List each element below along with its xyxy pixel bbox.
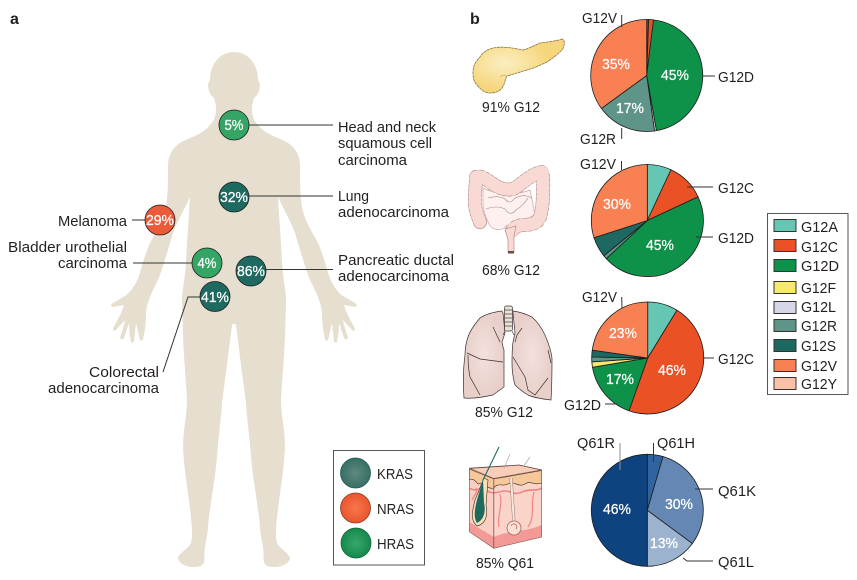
legend: G12 and mutation colours: G12F [801,280,836,297]
legend: G12 and mutation colours: G12C [801,239,838,256]
text: lung G12 share: 85% G12 [475,404,533,421]
pie chart: melanoma: 46% [603,501,631,518]
legend: G12 and mutation colours: G12A [801,219,838,236]
pie labels: melanoma: Q61K [718,483,756,500]
callout: melanoma [58,205,175,235]
pie labels: melanoma: Q61L [718,554,754,571]
pie labels: melanoma: Q61H [657,435,695,452]
pie chart: colorectal: 30% [603,196,631,213]
pie chart: colorectal: 45% [646,237,674,254]
legend: RAS isoforms: KRAS [377,466,413,483]
pie chart: pancreas: 17% [616,100,644,117]
callout: bladder [8,239,222,278]
callout: head and neck: carcinoma [338,152,408,169]
pie chart: melanoma: 13% [650,535,678,552]
callout: melanoma: Melanoma [58,213,128,230]
pie labels: pancreas: G12D [718,69,754,86]
callout: pancreatic: Pancreatic ductal [338,252,454,269]
pie chart: melanoma [591,454,703,566]
callout: lung: Lung [338,188,369,205]
callout: bladder: 4% [198,255,216,272]
pie chart: lung: 23% [609,325,637,342]
icon: lungs [463,306,552,400]
legend: G12 and mutation colours: G12V [801,358,837,375]
callout: colorectal [48,282,230,397]
pie labels: lung: G12D [564,397,601,414]
legend: G12 and mutation colours: G12L [801,299,836,316]
pie chart: colorectal [591,164,703,277]
legend: G12 and mutation colours: G12S [801,338,836,355]
callout: colorectal: 41% [201,289,229,306]
legend: RAS isoforms: NRAS [377,501,414,518]
body silhouette [111,52,357,567]
callout: colorectal: adenocarcinoma [48,380,160,397]
callout: lung [219,182,450,221]
pie chart: pancreas [591,19,703,132]
pie chart: lung [592,302,704,414]
callout: head and neck: Head and neck [338,119,436,136]
text: pancreas G12 share: 91% G12 [482,99,540,116]
legend: RAS isoforms [334,450,424,565]
pie labels: colorectal: G12V [580,156,616,173]
callout: melanoma: 29% [146,212,174,229]
callout: lung: 32% [220,189,248,206]
pie chart: pancreas: 35% [602,56,630,73]
panel label b: b [470,11,480,28]
pie labels: colorectal: G12D [718,230,754,247]
pie labels: pancreas: G12V [582,10,617,27]
pie chart: lung: 17% [606,371,634,388]
pie chart: melanoma: 30% [665,496,693,513]
pie labels: colorectal: G12C [718,180,754,197]
legend: G12 and mutation colours [768,214,848,394]
pie labels: lung: G12C [718,351,754,368]
callout: bladder: carcinoma [58,255,128,272]
callout: head and neck [219,110,436,169]
icon: pancreas [473,39,564,93]
text: colon G12 share: 68% G12 [482,262,540,279]
legend: G12 and mutation colours: G12Y [801,376,837,393]
pie labels: lung [564,289,754,414]
panel label a: a [10,11,19,28]
pie labels: colorectal [580,156,754,247]
pie chart: pancreas: 45% [661,67,689,84]
callout: pancreatic [236,252,454,286]
icon: skin section [469,447,542,548]
callout: head and neck: 5% [224,117,244,134]
callout: head and neck: squamous cell [338,135,432,152]
callout: colorectal: Colorectal [89,364,159,381]
pie labels: melanoma: Q61R [577,435,615,452]
legend: G12 and mutation colours: G12D [801,258,839,275]
legend: RAS isoforms: HRAS [377,536,414,553]
icon: colon [475,172,543,254]
text: skin Q61 share: 85% Q61 [476,555,534,572]
pie labels: lung: G12V [582,289,617,306]
pie chart: lung: 46% [658,362,686,379]
pie labels: pancreas [580,10,754,148]
callout: pancreatic: adenocarcinoma [338,268,450,285]
pie labels: pancreas: G12R [580,131,616,148]
callout: lung: adenocarcinoma [338,204,450,221]
callout: bladder: Bladder urothelial [8,239,127,256]
legend: G12 and mutation colours: G12R [801,318,837,335]
callout: pancreatic: 86% [237,263,265,280]
pie labels: melanoma [577,435,756,571]
